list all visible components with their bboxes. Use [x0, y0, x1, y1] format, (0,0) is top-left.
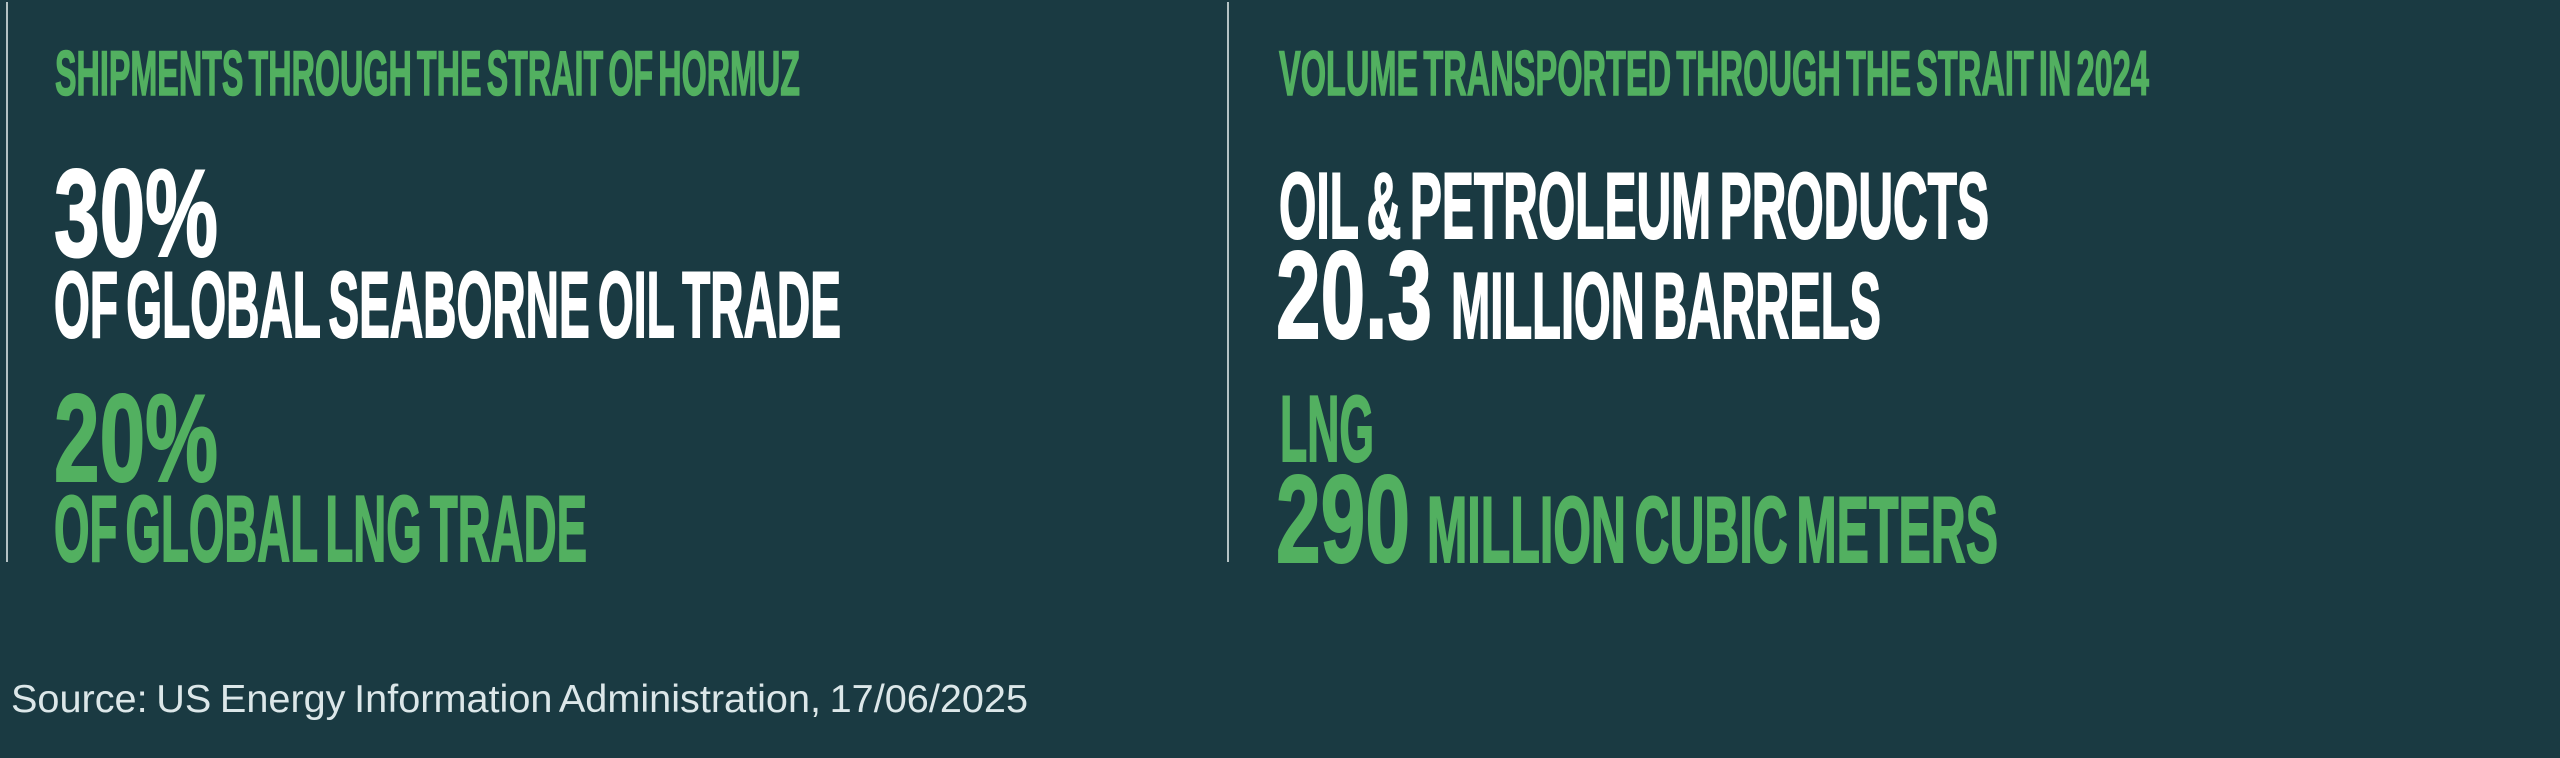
- stat: 20.3: 20.3: [1276, 227, 1432, 365]
- source note: Source: US Energy Information Administration, 17/06/2025: [11, 678, 1028, 721]
- panel: volume transported in 2024: LNG: [1280, 376, 1374, 481]
- panel: shipments through the strait: [6, 2, 841, 581]
- unit: million cubic meters: MILLION CUBIC METERS: [1427, 477, 1998, 582]
- heading: shipments: SHIPMENTS THROUGH THE STRAIT OF HORMUZ: [55, 39, 800, 109]
- panel: shipments through the strait: OF GLOBAL LNG TRADE: [54, 476, 587, 581]
- panel: volume transported in 2024: [1227, 2, 2149, 589]
- unit: million barrels: MILLION BARRELS: [1451, 253, 1881, 358]
- text: OF GLOBAL SEABORNE OIL TRADE: [54, 252, 841, 357]
- stat: 290: 290: [1276, 451, 1410, 589]
- stat: 20%: 20%: [54, 370, 218, 508]
- stat: 30%: 30%: [54, 145, 218, 283]
